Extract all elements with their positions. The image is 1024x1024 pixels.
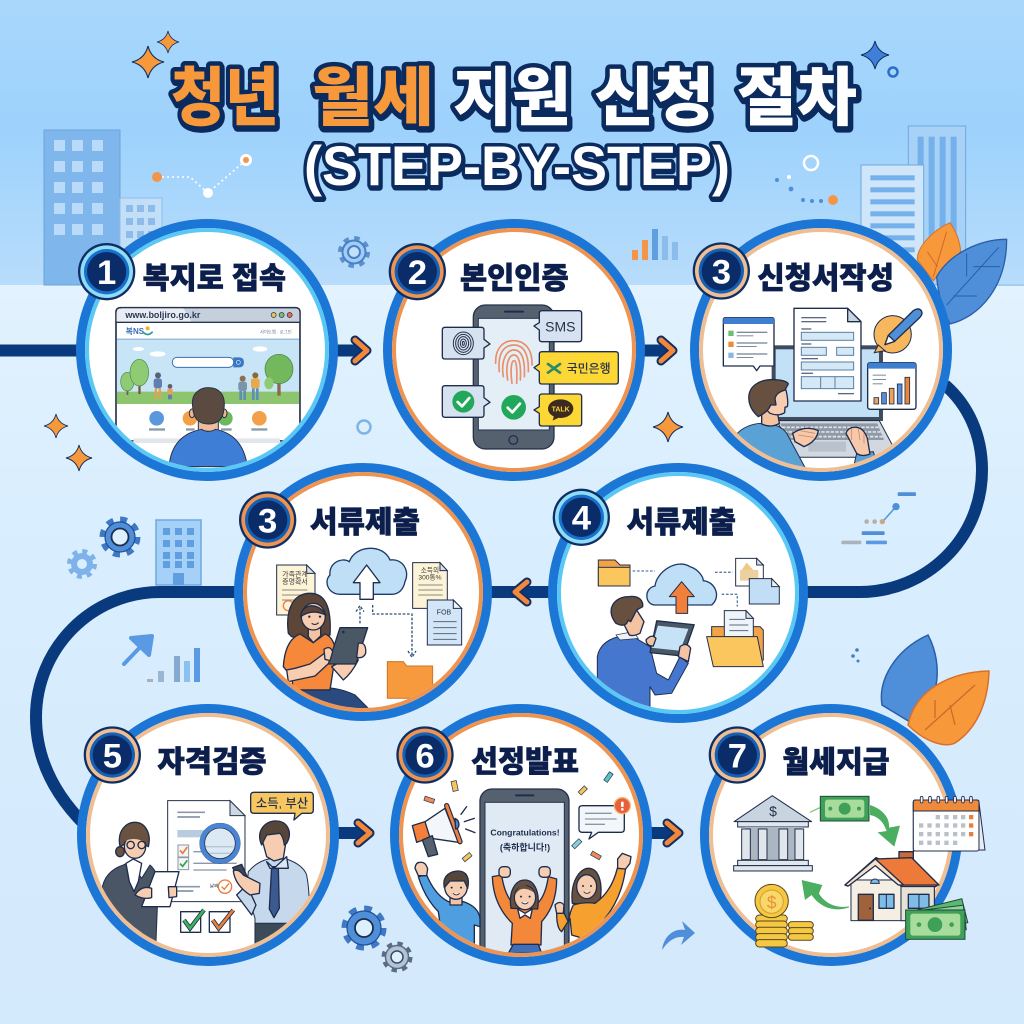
- number badge 3: 3: [712, 253, 731, 291]
- heading step 1: 복지로 접속: [143, 263, 286, 296]
- background: sky band: [0, 0, 1024, 285]
- ring: [82, 708, 334, 962]
- panel: step 1 portal access: [78, 224, 333, 476]
- upload illustration: FOB: [437, 610, 451, 617]
- upload illustration: 가족관계: [282, 570, 308, 579]
- ring: [388, 224, 640, 476]
- heading step 7: 월세지급: [782, 746, 890, 779]
- decorative network dots upper left: [152, 154, 252, 198]
- title: [171, 62, 857, 134]
- browser illustration: 사이트맵 · 로그인: [260, 328, 292, 335]
- arrow: step 2 to 3: [661, 340, 673, 361]
- arrow: step 1 to 2: [355, 340, 367, 361]
- subtitle: (STEP-BY-STEP): [304, 134, 730, 197]
- phone with verification illustration: TALK: [552, 406, 570, 413]
- ring: [552, 468, 804, 718]
- ring: [694, 224, 948, 476]
- phone with verification illustration: 국민은행: [567, 361, 611, 376]
- celebration illustration: (축하합니다!): [500, 841, 550, 852]
- panel: step 6 selection announcement: [394, 708, 648, 962]
- title: 절차: [737, 62, 857, 134]
- small rings: [358, 68, 898, 434]
- arrow: step 6 to 7: [667, 823, 679, 843]
- small curved arrow decoration: [662, 921, 695, 950]
- upload illustration: [277, 548, 462, 708]
- laptop and form illustration: [723, 308, 922, 469]
- number badge 2: 2: [408, 254, 427, 292]
- number badge 6: 6: [415, 737, 435, 775]
- heading document left: 서류제출: [310, 507, 420, 540]
- cloud upload illustration: [597, 558, 779, 708]
- sparkles: [44, 31, 889, 471]
- celebration illustration: [412, 772, 631, 962]
- verification illustration: 소득, 부산: [256, 797, 308, 811]
- ring: [80, 224, 334, 476]
- number badge 7: [709, 726, 766, 784]
- payment flow illustration: $: [769, 803, 777, 819]
- upload illustration: 증명확서: [282, 577, 308, 586]
- number badge 6: [396, 726, 454, 784]
- browser illustration: 복NS: [126, 327, 145, 336]
- number badge 2: [389, 243, 446, 300]
- phone with verification illustration: SMS: [545, 318, 575, 334]
- process path: connecting road: [0, 350, 982, 833]
- celebration illustration: Congratulations!: [490, 828, 560, 838]
- browser illustration: [116, 308, 300, 467]
- small data dashes decoration: [841, 492, 916, 544]
- upload illustration: 300통%: [418, 573, 442, 581]
- left skyline buildings: [44, 130, 162, 285]
- title: 지원: [453, 62, 571, 134]
- right skyline buildings: [861, 126, 1024, 286]
- heading step 6: 선정발표: [471, 746, 579, 779]
- heading step 5: 자격검증: [157, 746, 267, 779]
- growth arrow and chart decoration: [124, 636, 200, 682]
- number badge document left: 3: [258, 502, 277, 540]
- verification illustration: [102, 792, 313, 945]
- number badge 3: [693, 242, 750, 300]
- panel: document submission left: [238, 468, 488, 716]
- title: 신청: [594, 62, 714, 134]
- bar chart decoration top: [632, 229, 678, 260]
- ring: [394, 708, 648, 962]
- phone with verification illustration: [442, 305, 618, 449]
- number badge 7: 7: [728, 737, 747, 775]
- ring: [238, 468, 488, 716]
- leaves lower right: [881, 635, 989, 745]
- title: 월세: [312, 62, 434, 134]
- number badge 5: 5: [103, 737, 122, 775]
- title: 청년: [171, 62, 279, 134]
- ring: [704, 708, 958, 962]
- number badge 4: 4: [572, 500, 592, 538]
- payment flow illustration: [734, 796, 985, 947]
- panel: step 3 application writing: [693, 224, 948, 476]
- panel: step 7 rent payment: [704, 708, 985, 962]
- number badge 1: 1: [97, 254, 116, 292]
- panel: step 2 identity verification: [388, 224, 640, 476]
- number badge document left: [239, 491, 296, 549]
- arrow: document step leftward: [515, 582, 527, 602]
- panel: step 4 document submission right: [552, 468, 804, 718]
- decorative ring and dots upper right: [775, 156, 838, 205]
- panel: step 5 eligibility check: [82, 708, 334, 962]
- payment flow illustration: $: [767, 892, 777, 912]
- building decoration: [156, 520, 201, 585]
- heading step 4: 서류제출: [627, 507, 736, 540]
- arrow: step 5 to 6: [358, 823, 370, 843]
- leaves top right: [917, 223, 1007, 324]
- number badge 5: [84, 726, 141, 784]
- heading step 3: 신청서작성: [757, 263, 894, 296]
- heading step 2: 본인인증: [460, 263, 569, 296]
- verification illustration: 날짜: [210, 883, 219, 890]
- number badge 1: [78, 243, 135, 300]
- browser illustration: www.boljiro.go.kr: [124, 310, 201, 320]
- gear icons: [70, 238, 410, 970]
- background: lower area: [0, 285, 1024, 1024]
- tiny scatter dots: [851, 648, 860, 662]
- number badge 4: [553, 489, 610, 546]
- upload illustration: 소득의: [421, 566, 439, 575]
